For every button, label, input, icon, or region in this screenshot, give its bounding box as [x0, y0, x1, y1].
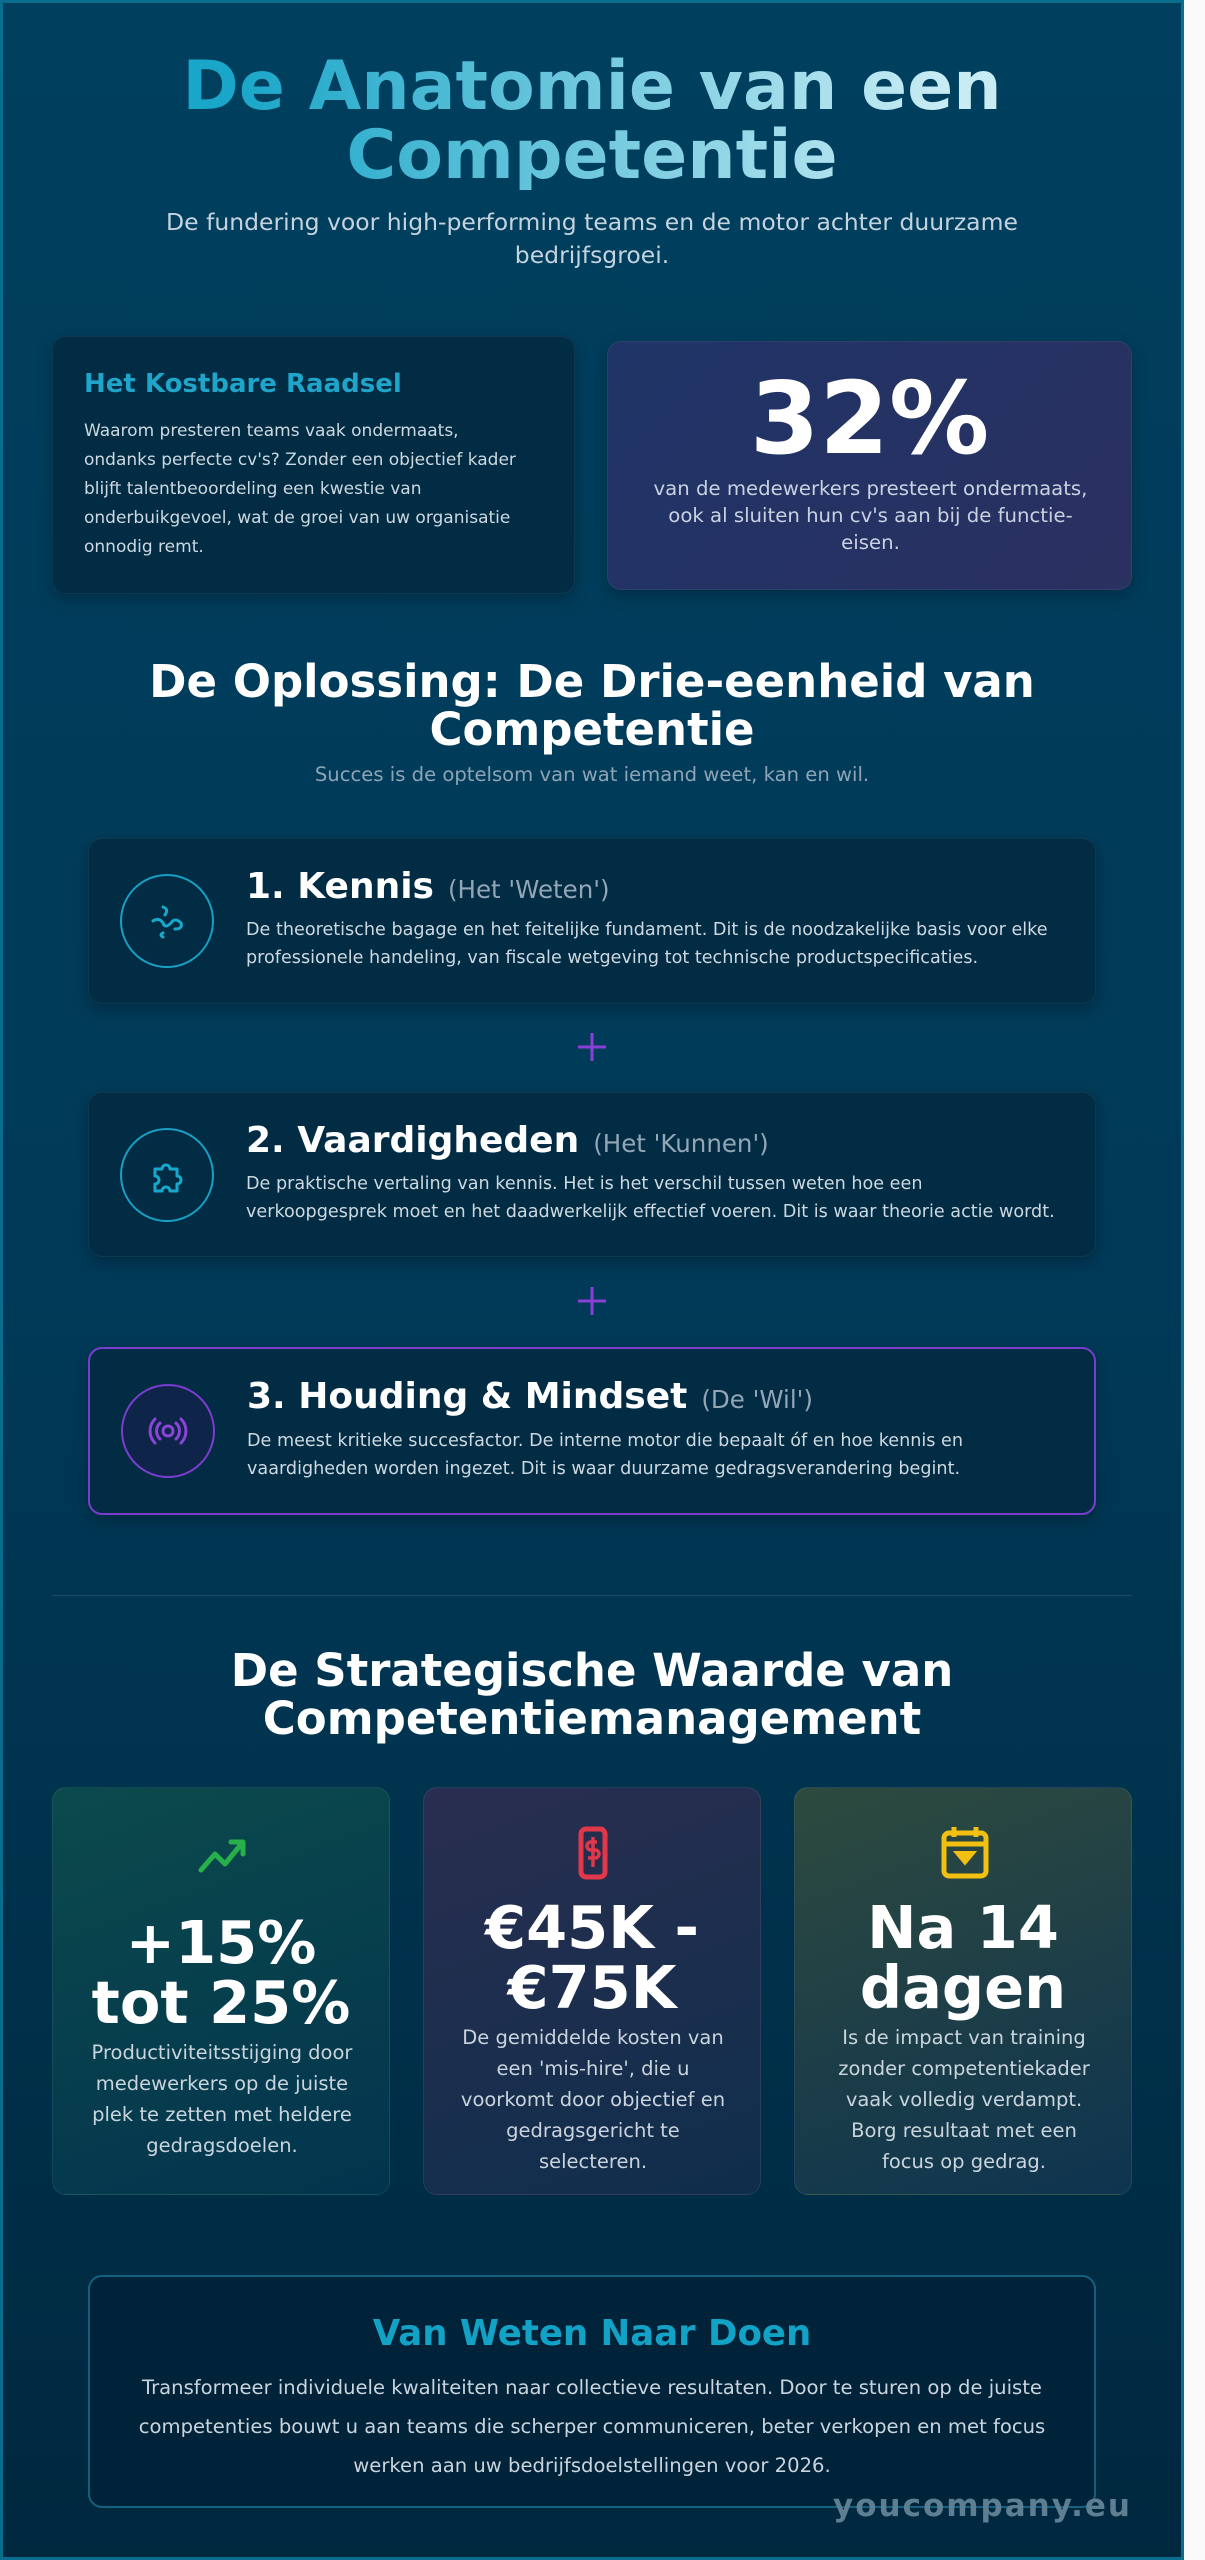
- text: productiviteit: Productiviteitsstijging door medewerkers op de juiste plek te zetten met heldere gedragsdoelen.: [92, 2041, 352, 2157]
- icon: calendar: [942, 1827, 988, 1878]
- text: raadsel: onderbuikgevoel, wat de groei van uw organisatie: [84, 508, 510, 528]
- title: De Anatomie van een: [182, 47, 1002, 126]
- icon: broadcast: [121, 1384, 215, 1478]
- number: mis-hire: €45K -: [485, 1893, 699, 1962]
- text: raadsel: ondanks perfecte cv's? Zonder een objectief kader: [84, 450, 516, 470]
- number: mis-hire: €75K: [508, 1953, 676, 2022]
- heading: van weten naar doen: Van Weten Naar Doen: [373, 2313, 811, 2354]
- text: raadsel: [84, 421, 516, 557]
- text: vaardigheden: [246, 1174, 1055, 1222]
- text: kennis: professionele handeling, van fiscale wetgeving tot technische productspecificaties.: [246, 948, 978, 968]
- stat card: productiviteit: [52, 1787, 390, 2195]
- heading: oplossing: De Oplossing: De Drie-eenheid van Competentie: [149, 655, 1035, 756]
- number: mis-hire: [484, 1893, 699, 2022]
- text: 32% caption: van de medewerkers presteert ondermaats, ook al sluiten hun cv's aan bij de functie-eisen.: [654, 477, 1087, 554]
- number: productiviteit: tot 25%: [92, 1968, 350, 2037]
- footer: brand: youcompany.eu: [833, 2488, 1132, 2524]
- text: raadsel: Waarom presteren teams vaak ondermaats,: [84, 421, 459, 441]
- title: vaardigheden: 2. Vaardigheden (Het 'Kunnen'): [246, 1120, 769, 1161]
- heading: strategische waarde: De Strategische Waarde van Competentiemanagement: [231, 1644, 953, 1745]
- icon: puzzle: [120, 1128, 214, 1222]
- title: Competentie: [346, 116, 838, 195]
- icon: brain: [120, 874, 214, 968]
- text: kennis: De theoretische bagage en het feitelijke fundament. Dit is de noodzakelijke basis voor elke: [246, 920, 1048, 940]
- number: productiviteit: +15%: [126, 1908, 316, 1977]
- panel: vaardigheden: [88, 1092, 1096, 1257]
- number: 14 dagen: [860, 1893, 1066, 2022]
- icon: plus 1: [578, 1033, 606, 1061]
- number: productiviteit: [92, 1908, 350, 2037]
- title: houding: 3. Houding & Mindset (De 'Wil'): [247, 1376, 813, 1417]
- number: 14 dagen: dagen: [860, 1953, 1066, 2022]
- stat card: mis-hire: [423, 1787, 761, 2195]
- number: 14 dagen: Na 14: [867, 1893, 1059, 1962]
- text: houding: vaardigheden worden ingezet. Dit is waar duurzame gedragsverandering begint.: [247, 1459, 960, 1479]
- panel: van weten naar doen: [88, 2275, 1096, 2508]
- text: 14 dagen: Is de impact van training zonder competentiekader vaak volledig verdampt. Borg resultaat met een focus op gedrag.: [838, 2026, 1090, 2173]
- icon: trend up: [198, 1840, 246, 1872]
- panel: houding: [88, 1347, 1096, 1515]
- heading: raadsel: Het Kostbare Raadsel: [84, 369, 402, 399]
- title: [0, 52, 1184, 190]
- subheading: oplossing: Succes is de optelsom van wat iemand weet, kan en wil.: [315, 763, 869, 786]
- text: houding: [247, 1431, 963, 1479]
- icon: plus 2: [578, 1287, 606, 1315]
- panel: 32% stat: [607, 341, 1132, 590]
- number: 32%: 32%: [750, 360, 989, 477]
- text: raadsel: onnodig remt.: [84, 537, 204, 557]
- text: vaardigheden: verkoopgesprek moet en het daadwerkelijk effectief voeren. Dit is waar theorie actie wordt.: [246, 1202, 1055, 1222]
- text: houding: De meest kritieke succesfactor. De interne motor die bepaalt óf en hoe kennis en: [247, 1431, 963, 1451]
- text: van weten naar doen: Transformeer individuele kwaliteiten naar collectieve resultaten. Door te sturen op de juiste competenties bouwt u aan teams die scherper communiceren, beter verkopen en met focus werken aan uw bedrijfsdoelstellingen voor 2026.: [139, 2376, 1045, 2477]
- text: kennis: [246, 920, 1048, 968]
- panel: kennis: [88, 838, 1096, 1004]
- text: mis-hire: De gemiddelde kosten van een 'mis-hire', die u voorkomt door objectief en gedragsgericht te selecteren.: [461, 2026, 725, 2173]
- text: vaardigheden: De praktische vertaling van kennis. Het is het verschil tussen weten hoe een: [246, 1174, 922, 1194]
- icon: dollar phone: [578, 1826, 608, 1880]
- subtitle: De fundering voor high-performing teams en de motor achter duurzame bedrijfsgroei.: [166, 208, 1018, 269]
- title: kennis: 1. Kennis (Het 'Weten'): [246, 866, 610, 907]
- stat card: 14 dagen: [794, 1787, 1132, 2195]
- text: raadsel: blijft talentbeoordeling een kwestie van: [84, 479, 422, 499]
- panel: het kostbare raadsel: [52, 336, 575, 594]
